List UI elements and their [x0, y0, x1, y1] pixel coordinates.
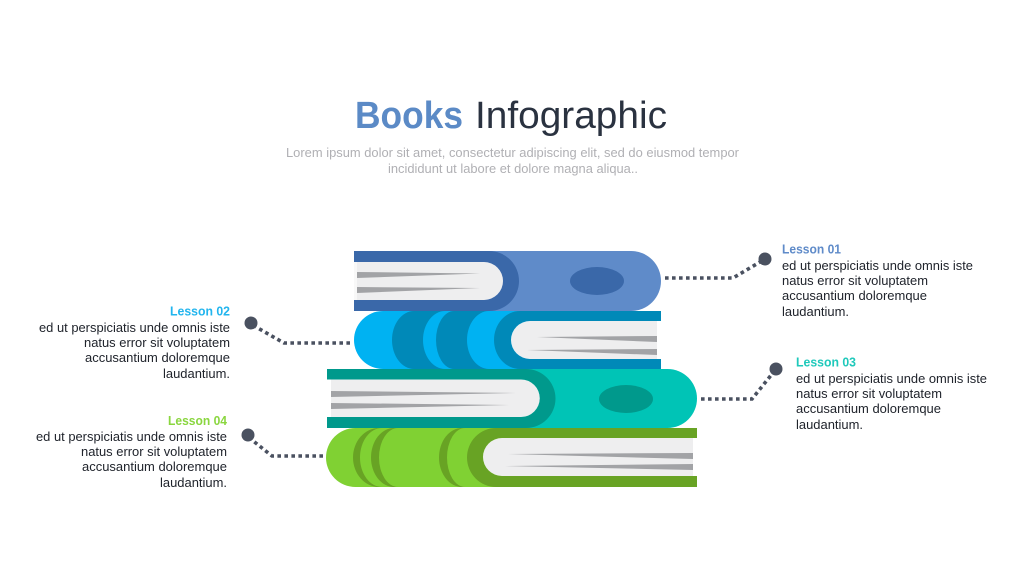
text: lesson 04: laudantium. [160, 476, 227, 490]
text: lesson 03: laudantium. [796, 418, 863, 432]
subtitle [286, 145, 740, 176]
book 3: teal [327, 369, 697, 428]
text: lesson 01: natus error sit voluptatem [782, 274, 928, 288]
title: Books [355, 95, 463, 137]
connector: lesson 03 [701, 362, 782, 399]
text: lesson 02: accusantium doloremque [85, 351, 230, 365]
text: lesson 01: Lesson 01 [782, 242, 841, 256]
connector: lesson 04 [242, 428, 323, 456]
text: lesson 04: Lesson 04 [168, 414, 227, 428]
subtitle: incididunt ut labore et dolore magna aliqua.. [388, 161, 638, 176]
text: lesson 03 [796, 356, 987, 432]
connector: lesson 02 [244, 316, 350, 343]
text: lesson 04: natus error sit voluptatem [81, 445, 227, 459]
text: lesson 02 [39, 304, 230, 381]
text: lesson 02: Lesson 02 [170, 304, 230, 318]
text: lesson 02: laudantium. [163, 367, 230, 381]
text: lesson 01 [782, 242, 973, 319]
text: lesson 03: Lesson 03 [796, 356, 856, 370]
text: lesson 01: accusantium doloremque [782, 289, 927, 303]
text: lesson 01: ed ut perspiciatis unde omnis iste [782, 259, 973, 273]
text: lesson 04: accusantium doloremque [82, 460, 227, 474]
text: lesson 04: ed ut perspiciatis unde omnis iste [36, 430, 227, 444]
title [355, 95, 667, 137]
book 1: blue [354, 251, 661, 311]
text: lesson 03: accusantium doloremque [796, 402, 941, 416]
text: lesson 03: natus error sit voluptatem [796, 387, 942, 401]
text: lesson 03: ed ut perspiciatis unde omnis iste [796, 372, 987, 386]
text: lesson 01: laudantium. [782, 305, 849, 319]
subtitle: Lorem ipsum dolor sit amet, consectetur adipiscing elit, sed do eiusmod tempor [286, 145, 740, 160]
book 4: green [326, 428, 697, 487]
connector: lesson 01 [665, 252, 772, 278]
text: lesson 02: natus error sit voluptatem [84, 336, 230, 350]
text: lesson 04 [36, 414, 227, 490]
title: Infographic [475, 95, 667, 137]
book 2: light blue [354, 311, 661, 369]
text: lesson 02: ed ut perspiciatis unde omnis iste [39, 321, 230, 335]
